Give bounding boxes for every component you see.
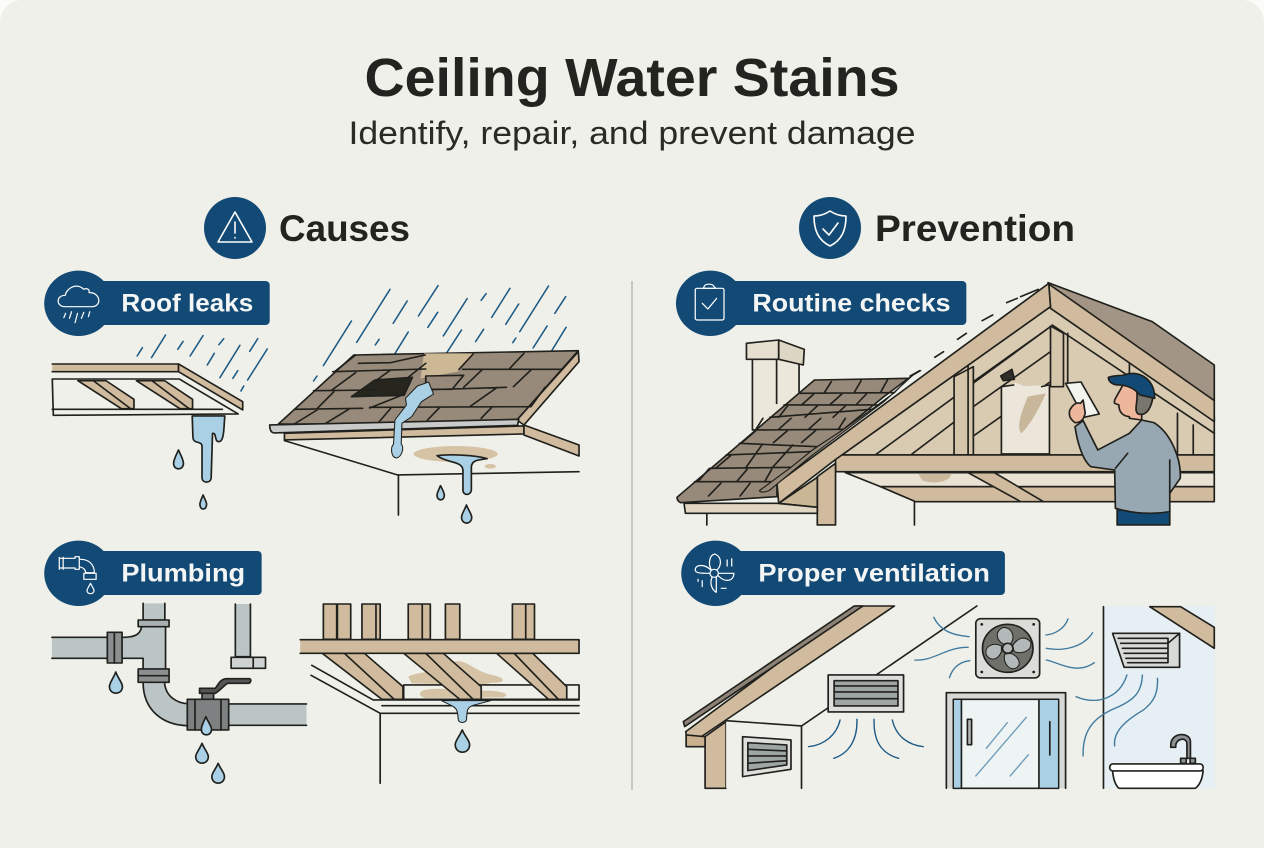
illustration: joists with ceiling stain (300, 604, 579, 783)
illustration: leaking pipe and valve (52, 603, 307, 783)
illustration: exhaust fan with airflow (915, 617, 1094, 678)
illustration: bathroom vent and sink (1076, 607, 1215, 788)
panel: proper ventilation (681, 541, 1215, 788)
icon: rain cloud (58, 286, 99, 323)
illustration: roof edge with drip (52, 335, 267, 509)
icon: clipboard check (695, 284, 724, 320)
label: proper ventilation (681, 541, 1005, 606)
icon: warning triangle (218, 212, 252, 242)
icon: dripping faucet (59, 557, 96, 594)
label: routine checks (676, 271, 966, 336)
heading: Prevention: Prevention (875, 208, 1075, 249)
label: proper ventilation: Proper ventilation (758, 560, 990, 588)
label: roof leaks (44, 271, 270, 336)
illustration: chimney (746, 340, 804, 430)
title: Ceiling Water Stains (364, 48, 900, 108)
heading: Causes (204, 197, 410, 259)
illustration: glass shower door (946, 693, 1066, 788)
icon: shield check (814, 211, 846, 246)
label: plumbing: Plumbing (121, 560, 245, 588)
panel: roof leaks (44, 271, 579, 523)
illustration: inspector with tablet (1066, 373, 1180, 525)
illustration: shingled roof (677, 289, 1038, 503)
illustration: damaged shingles and ceiling stain (270, 286, 579, 523)
label: routine checks: Routine checks (752, 290, 951, 318)
illustration: ceiling vent with airflow (809, 675, 923, 758)
illustration: attic rafter and wall vent (683, 606, 977, 788)
label: plumbing (44, 541, 262, 606)
subtitle: Identify, repair, and prevent damage (348, 115, 916, 151)
icon: fan (695, 554, 734, 592)
label: roof leaks: Roof leaks (121, 290, 253, 318)
illustration: gable and framing (684, 283, 1214, 525)
panel: routine checks (676, 271, 1214, 525)
heading: Prevention (799, 197, 1075, 259)
heading: Causes: Causes (279, 208, 410, 249)
panel: plumbing (44, 541, 579, 783)
